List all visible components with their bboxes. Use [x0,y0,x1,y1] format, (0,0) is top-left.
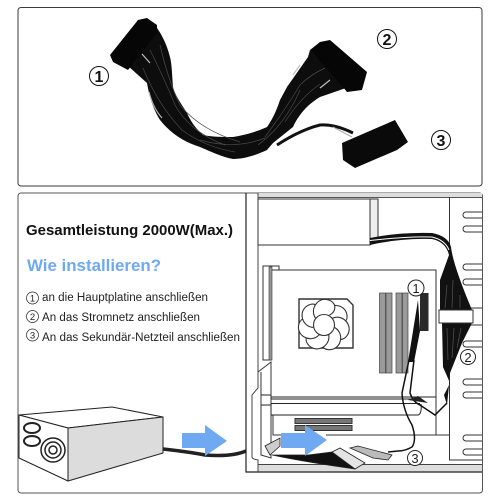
case vent slots [463,212,482,455]
label 2: 2 [383,32,392,49]
connector 3 [277,120,408,168]
connector 1 [110,18,157,70]
label 2 [378,30,396,49]
bottom connectors [265,438,392,469]
label 1: 1 [95,69,104,86]
label 1 in case [408,280,424,296]
cable bundle [128,28,346,159]
power cable bundle in case [370,233,473,452]
label 1 in case: 1 [412,281,420,296]
label 3 [432,130,450,150]
label 3 in case: 3 [411,451,419,466]
label 3: 3 [437,133,446,150]
CPU fan [295,295,354,353]
label 3 in case [408,450,422,466]
icon: power supply unit [19,407,163,481]
step 2: An das Stromnetz anschließen [42,312,200,324]
PSU power cable [163,449,246,456]
computer case diagram [246,193,482,472]
connector 2 [310,40,367,92]
cable clip [439,310,473,323]
step 1: 1 [30,294,35,304]
arrow: to case [182,425,227,456]
step 2: 2 [30,312,35,323]
internal power supply [258,199,378,245]
step 3: An das Sekundär-Netzteil anschließen [42,332,240,344]
arrow: to motherboard [281,425,327,456]
label 1 [90,66,108,86]
24-pin motherboard connector [420,293,428,331]
step 1: an die Hauptplatine anschließen [42,292,208,304]
RAM slots [380,293,408,373]
panel: cable photo [18,8,482,186]
label 2 in case [460,350,476,365]
motherboard [258,266,450,458]
heading: how to install: Wie installieren? [27,256,161,275]
step 3: 3 [30,330,35,342]
panel: installation [18,193,482,493]
label 2 in case: 2 [464,350,472,365]
heading: total power: Gesamtleistung 2000W(Max.) [26,223,233,239]
